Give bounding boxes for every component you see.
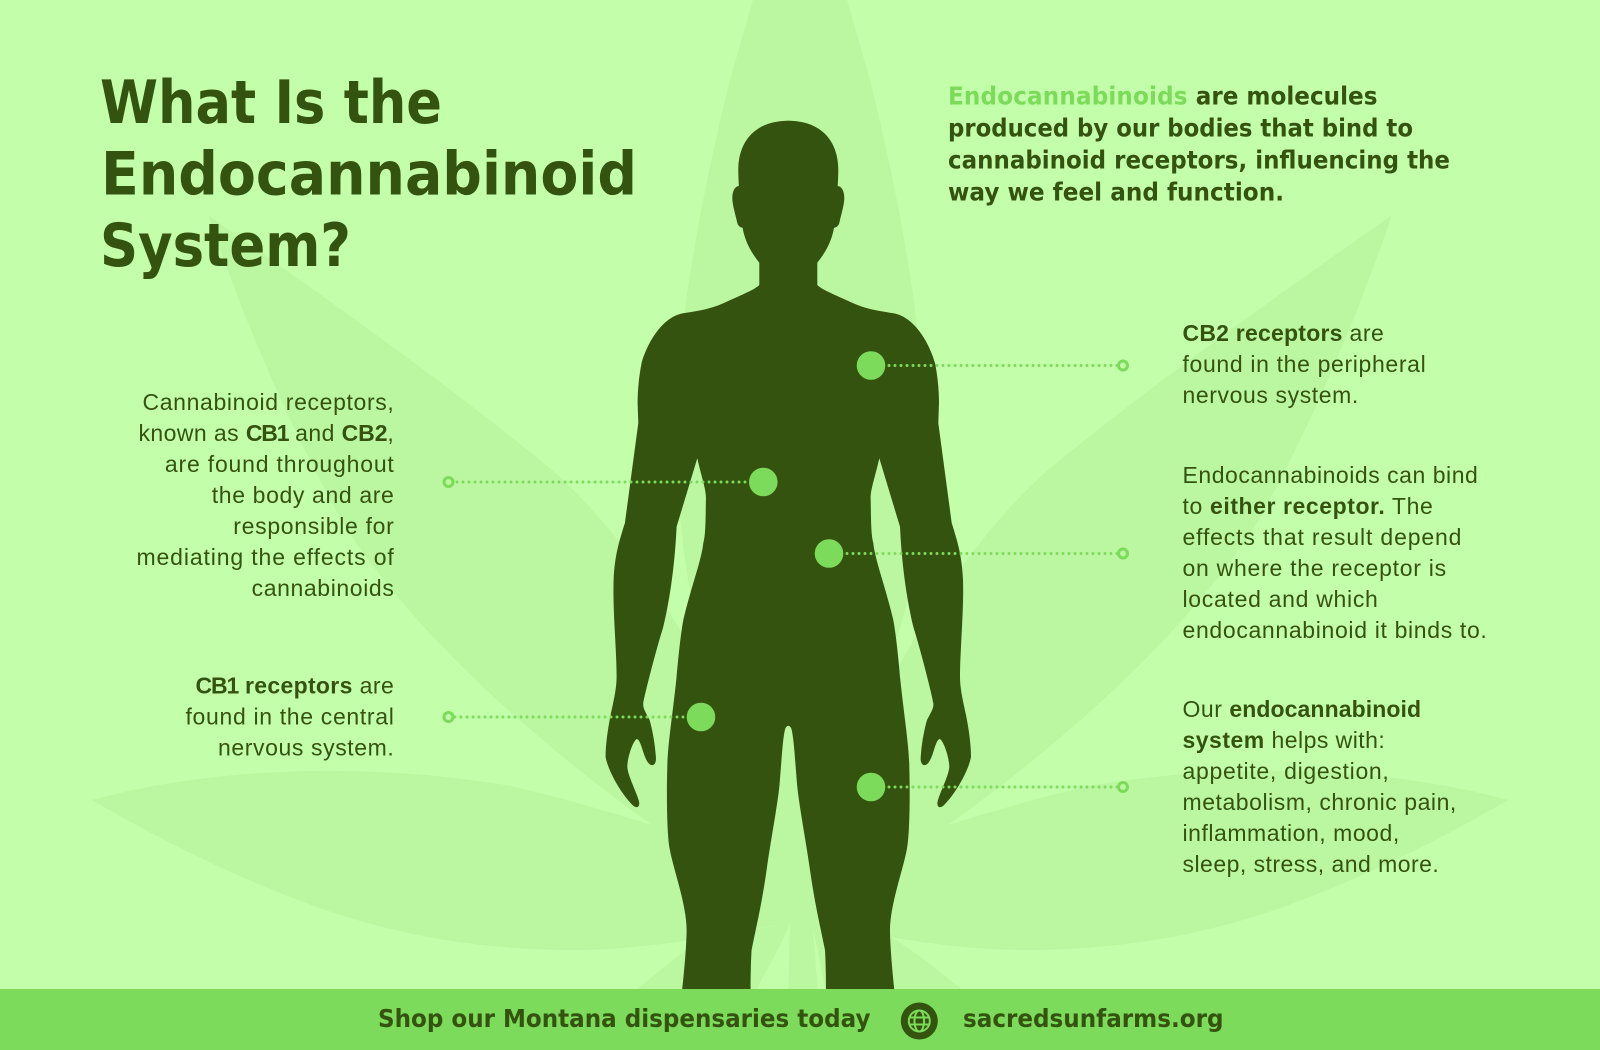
intro text: way we feel and function. [948,178,1284,206]
text block: CB1 receptors: nervous system. [218,734,394,760]
title: What Is the [100,68,442,138]
leaf: bottom left blade [620,923,790,1005]
intro text: produced by our bodies that bind to [948,114,1413,142]
text block: CB1 receptors: found in the central [186,704,394,730]
leaf: bottom right blade [813,930,980,1005]
human body silhouette [606,121,971,989]
text block: either receptor: located and which [1182,586,1378,612]
text block: cannabinoid receptors: Cannabinoid receptors, [142,389,394,415]
leaf: upper left blade [208,215,760,860]
leaf: lower right blade [810,771,1508,950]
text block: endocannabinoid system [1182,696,1457,877]
callout connector: either receptor [815,539,1128,568]
intro text [948,82,1450,206]
text block: cannabinoid receptors: the body and are [212,482,394,508]
text block: endocannabinoid system: sleep, stress, and more. [1182,851,1440,877]
callout connector: CB2 receptors [857,351,1128,380]
icon: globe [901,1002,938,1040]
text block: CB2 receptors [1182,320,1426,408]
callout connector: cannabinoid receptors [444,468,778,496]
footer website: sacredsunfarms.org [963,1004,1224,1033]
footer bar [0,989,1600,1050]
callout connector: endocannabinoid system [857,773,1128,801]
leaf: centre blade [676,0,924,1005]
callout connector: CB1 receptors [444,703,715,731]
title: System? [100,211,351,281]
text block: cannabinoid receptors: known as CB1 and CB2, [138,420,394,446]
text block: CB2 receptors: found in the peripheral [1182,351,1426,377]
text block: cannabinoid receptors: are found throughout [165,451,394,477]
text block: CB1 receptors [186,672,394,760]
text block: either receptor: Endocannabinoids can bind [1182,462,1478,488]
intro text: Endocannabinoids are molecules [948,82,1378,110]
text block: cannabinoid receptors: responsible for [233,513,394,539]
text block: endocannabinoid system: appetite, digestion, [1182,758,1390,784]
intro text: cannabinoid receptors, influencing the [948,146,1450,174]
text block: either receptor: on where the receptor is [1182,555,1447,581]
text block: either receptor [1182,462,1488,643]
text block: cannabinoid receptors: mediating the effects of [136,544,394,570]
text block: endocannabinoid system: metabolism, chronic pain, [1182,789,1457,815]
text block: either receptor: endocannabinoid it binds to. [1182,617,1488,643]
text block: endocannabinoid system: Our endocannabinoid [1182,696,1421,722]
title [100,68,637,281]
text block: cannabinoid receptors [136,389,394,601]
text block: endocannabinoid system: system helps with: [1182,727,1386,753]
text block: CB2 receptors: nervous system. [1182,382,1359,408]
text block: endocannabinoid system: inflammation, mood, [1182,820,1400,846]
title: Endocannabinoid [101,140,637,210]
text block: either receptor: to either receptor. The [1182,493,1434,519]
text block: either receptor: effects that result depend [1182,524,1462,550]
text block: CB1 receptors: CB1 receptors are [196,672,394,698]
leaf: lower left blade [92,771,790,950]
leaf: upper right blade [840,215,1392,860]
text block: CB2 receptors: CB2 receptors are [1182,320,1384,346]
text block: cannabinoid receptors: cannabinoids [252,575,394,601]
footer call to action: Shop our Montana dispensaries today [378,1004,870,1033]
